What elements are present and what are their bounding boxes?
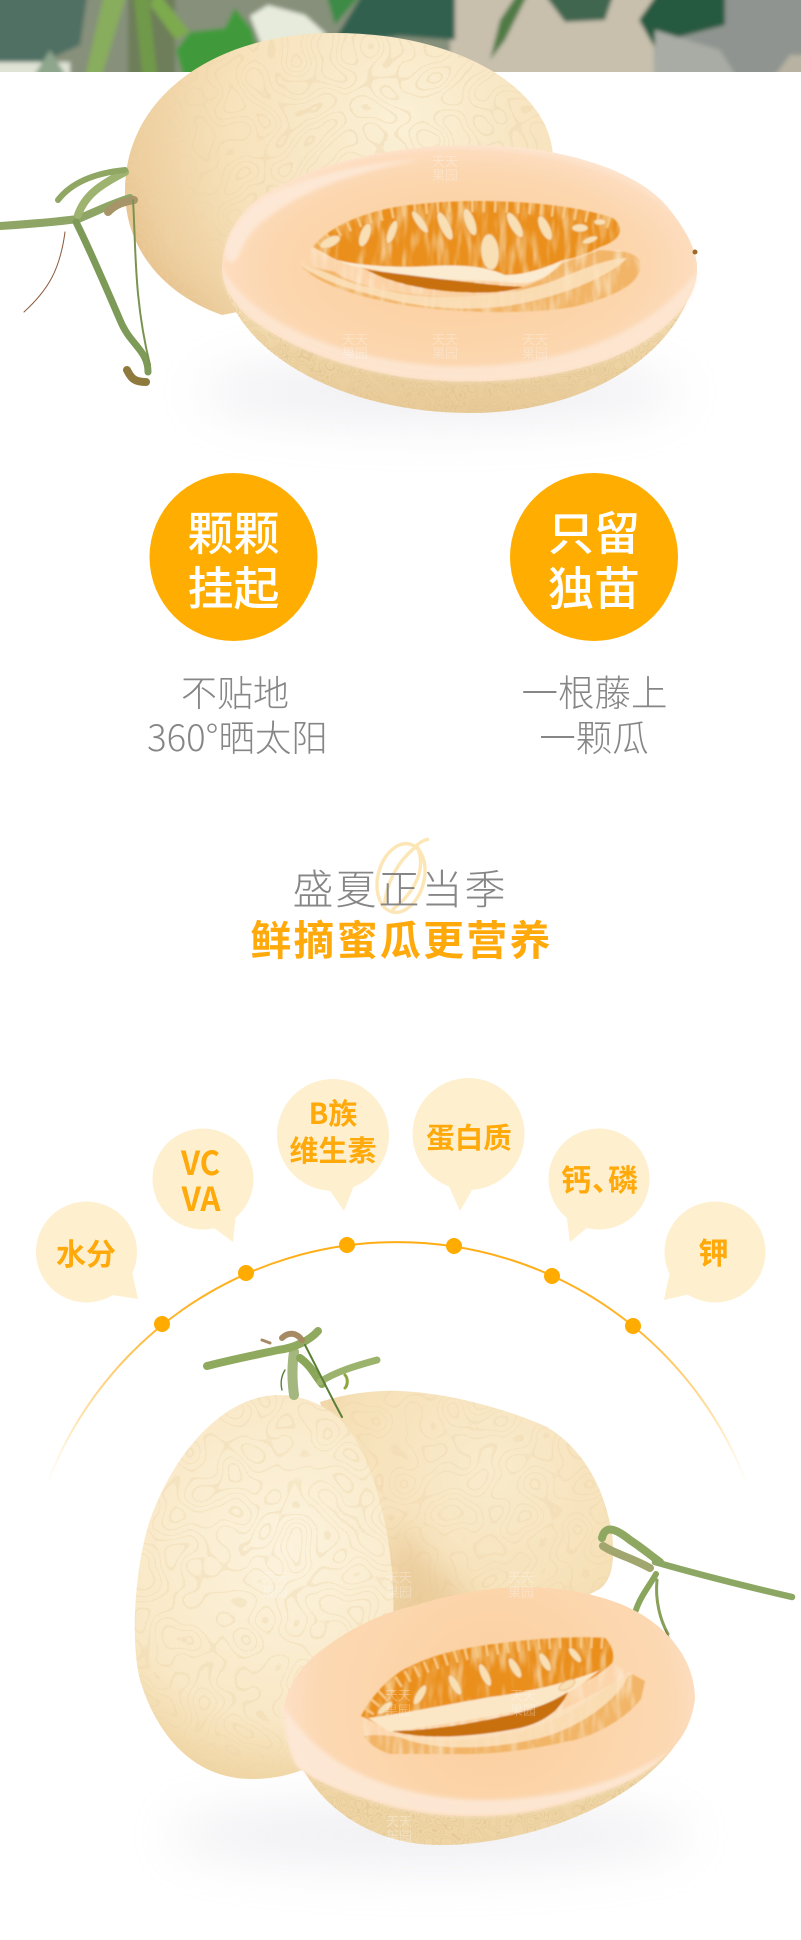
bubble: protein: 蛋白质 (426, 1116, 512, 1157)
caption: sun exposure (147, 665, 328, 762)
nutrient arc (46, 1237, 748, 1487)
watermarks: 天天 (386, 1811, 412, 1830)
watermarks: 果园 (386, 1582, 412, 1601)
melon photo: whole and halved melon (0, 30, 700, 424)
watermarks: 果园 (510, 1700, 536, 1719)
watermarks: 果园 (432, 343, 458, 362)
watermarks: 果园 (262, 1582, 288, 1601)
watermarks: 果园 (432, 165, 458, 184)
bubble: vitamin C and A: VA (181, 1173, 221, 1221)
watermarks: 天天 (342, 329, 368, 348)
bubble: B vitamins: 维生素 (289, 1128, 377, 1170)
bubble: protein (412, 1078, 524, 1211)
ground shadow (200, 360, 680, 424)
watermarks: 天天 (386, 1567, 412, 1586)
bubble: calcium and phosphorus (548, 1128, 650, 1242)
bubble: potassium (664, 1202, 766, 1302)
section heading: 鲜摘蜜瓜更营养 (250, 907, 553, 967)
watermarks: 天天 (432, 329, 458, 348)
watermarks: 天天 (432, 151, 458, 170)
caption: one melon per vine: 一颗瓜 (539, 709, 649, 762)
bubble: water: 水分 (56, 1230, 116, 1274)
watermarks: 果园 (508, 1582, 534, 1601)
ground shadow (170, 1801, 690, 1869)
feature circle: hanging: 挂起 (188, 553, 280, 619)
icon: melon outline (370, 838, 432, 918)
feature circle: hanging: 颗颗 (188, 498, 280, 564)
caption: one melon per vine: 一根藤上 (522, 664, 668, 717)
melon cavity (360, 1636, 646, 1755)
watermarks: 天天 (510, 1685, 536, 1704)
watermarks (262, 1567, 536, 1845)
seeds (376, 1646, 583, 1716)
melon photo: group of melons (130, 1331, 792, 1869)
section heading: 盛夏正当季 (292, 856, 508, 916)
halved melon (220, 145, 700, 415)
arc dots (154, 1237, 641, 1334)
bubble: B vitamins: B族 (309, 1091, 357, 1133)
halved melon (262, 1567, 700, 1847)
tall melon (130, 1390, 400, 1782)
right vine (602, 1530, 792, 1655)
back melon (320, 1390, 614, 1612)
bubble: B vitamins (277, 1079, 389, 1211)
watermarks: 果园 (386, 1826, 412, 1845)
caption: one melon per vine (522, 664, 668, 762)
stem stub on melon half (692, 250, 698, 254)
watermarks: 天天 (262, 1567, 288, 1586)
top vine (207, 1331, 377, 1417)
watermarks: 果园 (522, 343, 548, 362)
watermarks (342, 151, 548, 362)
feature circle: single seedling (510, 473, 678, 641)
feature circle: hanging (150, 473, 318, 641)
melon cavity (302, 200, 640, 313)
bubble: potassium: 钾 (698, 1229, 728, 1273)
seeds (318, 207, 606, 271)
watermarks: 天天 (508, 1567, 534, 1586)
watermarks: 果园 (385, 1700, 411, 1719)
background photo band (0, 0, 801, 72)
green vine and tendrils (0, 170, 150, 382)
bubble: vitamin C and A: VC (180, 1137, 220, 1185)
section heading (250, 838, 553, 967)
watermarks: 果园 (342, 343, 368, 362)
watermarks: 天天 (522, 329, 548, 348)
bubble: water (36, 1202, 138, 1302)
feature circle: single seedling: 独苗 (548, 553, 640, 619)
watermarks: 天天 (385, 1685, 411, 1704)
feature circle: single seedling: 只留 (548, 498, 640, 564)
caption: sun exposure: 360°晒太阳 (147, 709, 328, 762)
bubble: calcium and phosphorus: 钙、磷 (561, 1156, 638, 1200)
back whole melon (125, 33, 553, 315)
bubble: vitamin C and A (152, 1128, 254, 1242)
caption: sun exposure: 不贴地 (181, 665, 289, 717)
